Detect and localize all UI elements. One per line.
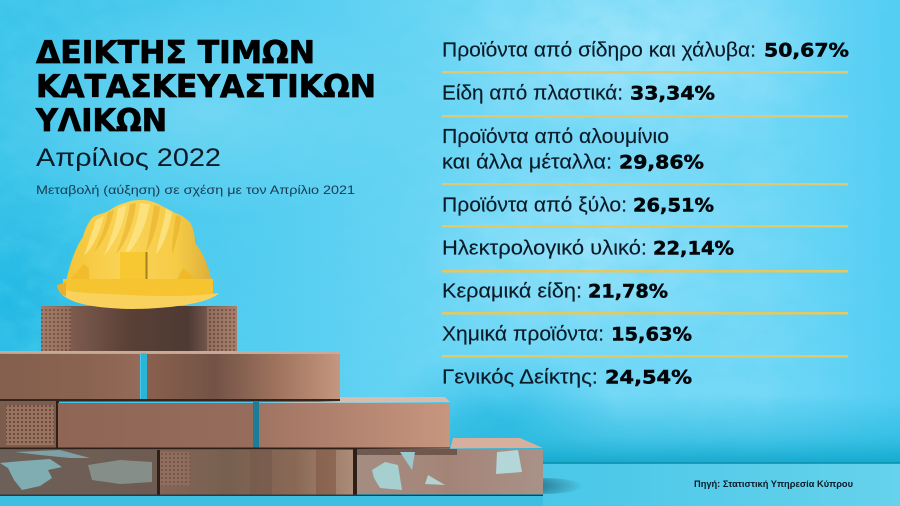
- row: aluminium and other metals: 29,86%: [619, 152, 704, 174]
- title: ΥΛΙΚΩΝ: [35, 103, 167, 139]
- row: plastics: 33,34%: [630, 82, 715, 104]
- row: general index: 24,54%: [605, 366, 692, 388]
- brick row 2 right: [147, 354, 340, 400]
- row: wood: 26,51%: [633, 194, 714, 216]
- brick row 2 left: [0, 354, 140, 399]
- row: ceramics: [442, 280, 668, 302]
- source note: Πηγή: Στατιστική Υπηρεσία Κύπρου: [694, 479, 853, 489]
- row: iron and steel: 50,67%: [764, 40, 849, 62]
- brick row 1: [41, 306, 237, 352]
- row: electrical: [442, 238, 734, 260]
- floor shadow: [503, 478, 583, 494]
- row: aluminium and other metals: και άλλα μέταλλα:: [442, 152, 612, 174]
- title: ΚΑΤΑΣΚΕΥΑΣΤΙΚΩΝ: [36, 69, 376, 105]
- icon: yellow hard hat: [57, 200, 219, 309]
- gaps: [141, 352, 147, 400]
- row: plastics: Είδη από πλαστικά:: [442, 82, 623, 104]
- row: plastics: [442, 82, 715, 104]
- brick row 4 right: [357, 438, 543, 494]
- row: aluminium and other metals: Προϊόντα από αλουμίνιο: [442, 126, 669, 148]
- row: wood: Προϊόντα από ξύλο:: [442, 194, 627, 216]
- brick row 3 far left: [0, 401, 56, 448]
- subtitle: date: Απρίλιος 2022: [36, 144, 221, 172]
- note: change compared to April 2021: Μεταβολή (αύξηση) σε σχέση με τον Απρίλιο 2021: [36, 183, 355, 197]
- row: chemicals: [442, 324, 692, 346]
- row: general index: Γενικός Δείκτης:: [442, 366, 598, 388]
- row: chemicals: 15,63%: [611, 324, 692, 346]
- brick row 4 left with blue paint: [0, 450, 157, 495]
- row: ceramics: Κεραμικά είδη:: [442, 280, 582, 302]
- brick row 4 middle: [160, 450, 353, 495]
- title: ΔΕΙΚΤΗΣ ΤΙΜΩΝ: [36, 35, 315, 71]
- brick row 3 middle: [58, 403, 253, 448]
- row: electrical: Ηλεκτρολογικό υλικό:: [442, 238, 647, 260]
- hard hat brim: [57, 285, 219, 309]
- brick row 3 right: [259, 397, 450, 449]
- row: general index: [442, 366, 692, 388]
- row: aluminium and other metals: [442, 126, 704, 174]
- row: iron and steel: Προϊόντα από σίδηρο και χάλυβα:: [442, 40, 756, 62]
- brick stack: [0, 306, 583, 506]
- row: electrical: 22,14%: [653, 238, 734, 260]
- list of material price changes: [442, 40, 849, 388]
- row: ceramics: 21,78%: [588, 280, 668, 302]
- row: wood: [442, 194, 714, 216]
- row: chemicals: Χημικά προϊόντα:: [442, 324, 604, 346]
- title: [35, 35, 376, 139]
